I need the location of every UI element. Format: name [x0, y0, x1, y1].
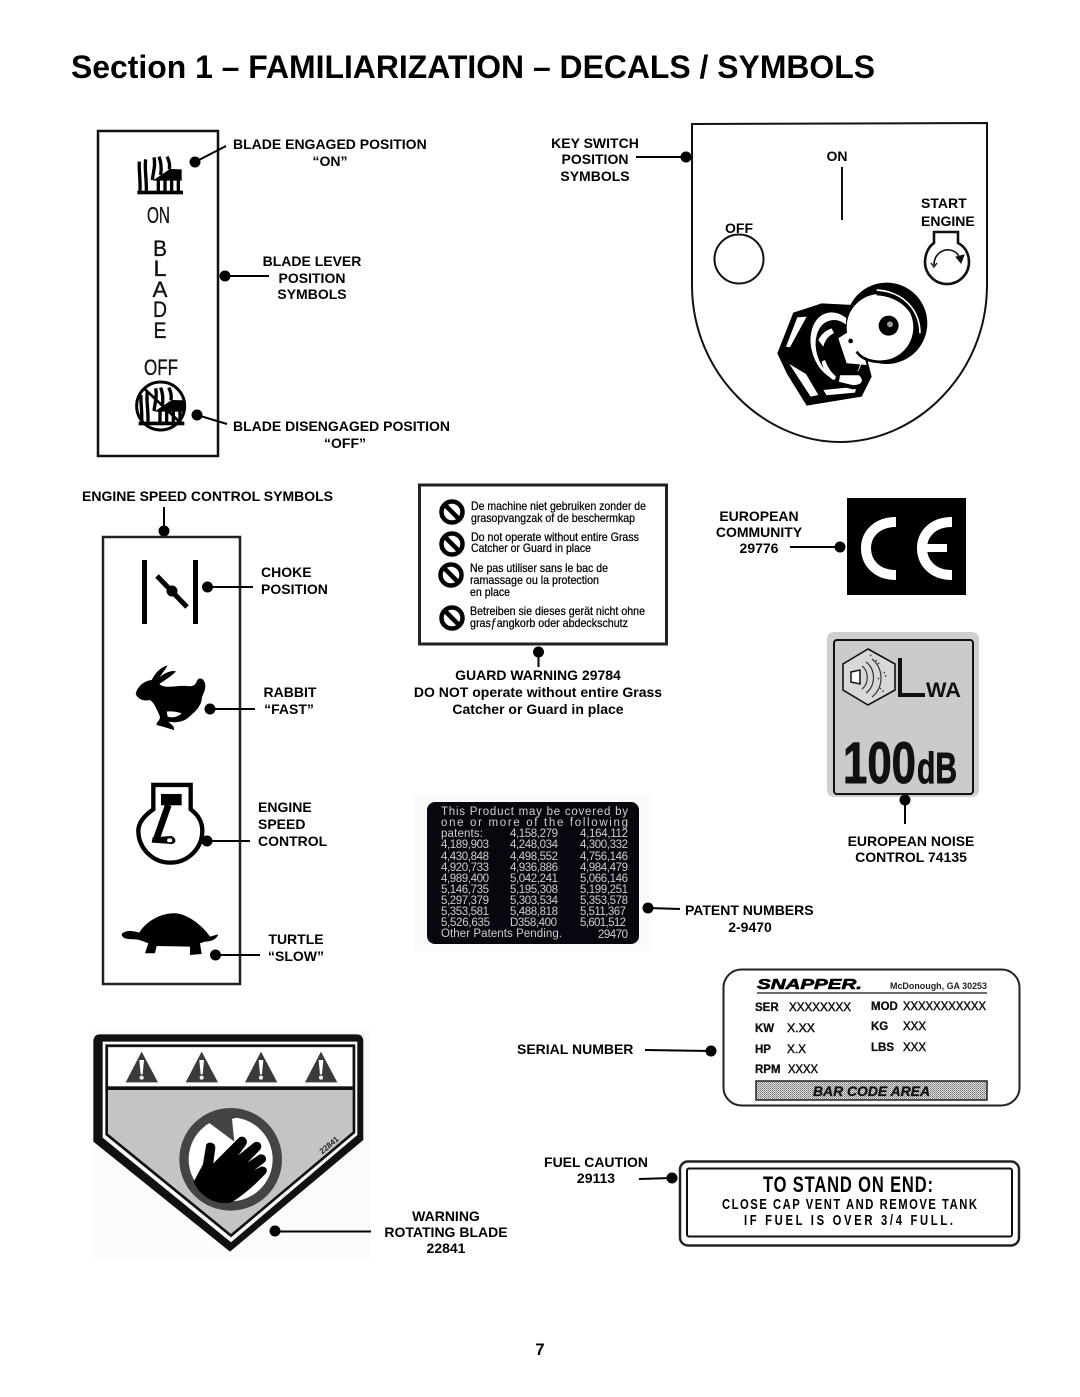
callout: guard warning 29784 [414, 646, 662, 717]
icon: blade disengaged [137, 382, 185, 430]
text: patent list: 4,248,034 [510, 839, 559, 851]
callout: serial number [517, 1041, 716, 1057]
icon: off circle [714, 234, 764, 284]
text: ON: ON [147, 202, 170, 228]
label: start engine: ENGINE [921, 213, 975, 229]
text: serial fields: XXXX [788, 1064, 818, 1076]
callout: turtle slow: TURTLE [268, 931, 324, 947]
text: patent list: 5,297,379 [441, 895, 489, 907]
icon: key in switch [777, 283, 927, 406]
callout: key switch position symbols: KEY SWITCH [551, 135, 639, 151]
text: fuel caution wording: IF FUEL IS OVER 3/4 FULL. [744, 1211, 953, 1228]
text: BLADE: L [154, 256, 166, 281]
text: serial fields: KG [871, 1021, 888, 1033]
callout: key switch position symbols: SYMBOLS [560, 168, 630, 184]
text: patent list: 29470 [598, 929, 628, 941]
text: patent list: 4,920,733 [441, 862, 489, 874]
icon: engine [138, 785, 202, 863]
callout: european community 29776: COMMUNITY [716, 524, 803, 540]
callout: blade disengaged position: BLADE DISENGAGED POSITION [233, 418, 450, 434]
page number: 7 [535, 1341, 545, 1359]
text: guard warning languages: Betreiben sie dieses gerät nicht ohne [470, 604, 645, 618]
panel: key switch decal [692, 123, 987, 442]
callout: european community 29776: EUROPEAN [719, 508, 799, 524]
callout: choke position: CHOKE [261, 564, 312, 580]
text: patent list: 5,303,534 [510, 895, 559, 907]
text: patent list: 4,189,903 [441, 839, 489, 851]
text: patent list [441, 806, 628, 941]
bar code area [756, 1081, 987, 1100]
text: patent list: 4,164,112 [580, 828, 628, 840]
callout: fuel caution 29113 [544, 1154, 678, 1186]
callout: blade disengaged position: “OFF” [324, 435, 366, 451]
callout: blade disengaged position [192, 410, 450, 451]
text: guard warning languages: en place [470, 585, 510, 599]
text: patent list: 4,498,552 [510, 851, 558, 863]
callout: rabbit fast [204, 684, 317, 717]
text: serial fields: SER [755, 1002, 779, 1014]
panel: LWA noise decal [827, 632, 979, 797]
text: patent list: 5,488,818 [510, 906, 558, 918]
text: fuel caution wording: TO STAND ON END: [763, 1173, 933, 1198]
text: guard warning languages: grasƒangkorb oder abdeckschutz [470, 616, 628, 630]
text: serial fields: X.X [787, 1044, 806, 1056]
text: patent list: 5,146,735 [441, 884, 489, 896]
icon: blade engaged [137, 157, 183, 194]
text: patent list: one or more of the following [441, 817, 628, 829]
text: decal number: 22841 [318, 1134, 341, 1156]
text: patent list: 5,511,367 [580, 906, 626, 918]
text: serial fields: XXX [903, 1021, 926, 1033]
callout: blade engaged position: “ON” [312, 153, 348, 169]
text: guard warning languages: Ne pas utiliser sans le bac de [470, 561, 608, 575]
icon: hand and blade [184, 1110, 277, 1206]
callout: blade lever symbols: POSITION [279, 270, 345, 286]
text: OFF: OFF [144, 355, 178, 380]
callout: guard warning 29784: GUARD WARNING 29784 [455, 667, 621, 683]
callout: serial number: SERIAL NUMBER [517, 1041, 633, 1057]
callout: european noise control [848, 794, 974, 865]
text: patent list: 5,526,635 [441, 917, 490, 929]
text: BLADE: A [152, 277, 168, 302]
text: patent list: 4,158,279 [510, 828, 558, 840]
text: patent list: 5,353,578 [580, 895, 628, 907]
text: BLADE: B [153, 236, 167, 261]
text: serial fields: HP [755, 1044, 771, 1056]
callout: patent numbers: PATENT NUMBERS [685, 902, 814, 918]
text: patent list: 4,756,146 [580, 851, 628, 863]
text: patent list: Other Patents Pending. [441, 928, 562, 940]
panel: fuel caution decal [680, 1162, 1019, 1246]
panel: rotating blade warning decal [93, 1030, 370, 1258]
text: patent list: 5,042,241 [510, 873, 558, 885]
text: fuel caution wording [722, 1173, 977, 1228]
callout: european noise control: EUROPEAN NOISE [848, 833, 974, 849]
label: start engine: START [921, 195, 967, 211]
text: patent list: 5,195,308 [510, 884, 558, 896]
text: snapper brand: McDonough, GA 30253 [890, 981, 987, 992]
callout: blade lever symbols: SYMBOLS [277, 286, 347, 302]
icon: turtle [122, 913, 218, 955]
text: BLADE [152, 236, 168, 343]
icon: warning triangles [126, 1052, 337, 1082]
text: guard warning languages [470, 499, 646, 630]
bar code area: BAR CODE AREA [813, 1083, 930, 1099]
callout: turtle slow: “SLOW” [268, 948, 324, 964]
text: patent list: D358,400 [510, 917, 557, 929]
text: patent list: 4,300,332 [580, 839, 628, 851]
label: ON: ON [826, 148, 848, 164]
callout: fuel caution 29113: 29113 [577, 1170, 615, 1186]
text: serial fields: LBS [871, 1042, 894, 1054]
callout: european community 29776 [716, 508, 846, 556]
text: L WA: WA [926, 679, 961, 702]
text: fuel caution wording: CLOSE CAP VENT AND REMOVE TANK [722, 1195, 977, 1212]
text: serial fields: KW [755, 1023, 774, 1035]
callout: european community 29776: 29776 [740, 540, 779, 556]
text: L WA [898, 658, 961, 702]
callout: choke position [202, 564, 328, 597]
panel: guard warning decal [420, 485, 666, 644]
text: serial fields: XXX [903, 1042, 926, 1054]
icon: sound hexagon [843, 649, 895, 705]
callout: engine speed control symbols [82, 488, 333, 536]
callout: engine speed control: SPEED [258, 816, 305, 832]
callout: blade lever symbols [220, 253, 361, 302]
panel: patent numbers decal [414, 795, 652, 951]
text: 100dB: 100 [843, 731, 916, 796]
text: serial fields: MOD [871, 1001, 898, 1013]
text: guard warning languages: Catcher or Guard in place [471, 541, 591, 555]
text: patent list: 5,601,512 [580, 917, 626, 929]
text: patent list: 5,199,251 [580, 884, 628, 896]
text: BLADE: E [154, 318, 166, 343]
callout: warning rotating blade 22841 [270, 1208, 508, 1256]
text: guard warning languages: grasopvangzak of de beschermkap [471, 511, 635, 525]
text: patent list: 4,989,400 [441, 873, 489, 885]
text: snapper brand: SNAPPER. [757, 977, 862, 993]
text: patent list: This Product may be covered by [441, 806, 628, 818]
callout: engine speed control: CONTROL [258, 833, 328, 849]
icon: rabbit [136, 665, 205, 730]
callout: fuel caution 29113: FUEL CAUTION [544, 1154, 648, 1170]
icon: choke [142, 560, 198, 624]
icon: prohibition signs [440, 502, 462, 628]
text: serial fields [755, 1001, 986, 1076]
label: OFF: OFF [725, 220, 753, 236]
callout: turtle slow [210, 931, 324, 964]
callout: warning rotating blade 22841: 22841 [427, 1240, 466, 1256]
label: start engine [921, 195, 975, 229]
text: guard warning languages: De machine niet gebruiken zonder de [471, 499, 646, 513]
text: guard warning languages: ramassage ou la protection [470, 573, 599, 587]
text: patent list: 4,936,886 [510, 862, 558, 874]
icon: CE mark decal [847, 498, 966, 595]
text: patent list: 4,984,479 [580, 862, 628, 874]
callout: rabbit fast: RABBIT [264, 684, 317, 700]
text: patent list: 4,430,848 [441, 851, 489, 863]
text: patent list: patents: [441, 828, 483, 840]
callout: european noise control: CONTROL 74135 [855, 849, 967, 865]
text: serial fields: RPM [755, 1064, 781, 1076]
callout: patent numbers [642, 902, 814, 935]
panel: serial number decal [724, 970, 1020, 1106]
text: 100dB: dB [917, 744, 957, 793]
callout: key switch position symbols: POSITION [562, 151, 628, 167]
callout: patent numbers: 2-9470 [728, 919, 772, 935]
icon: start engine [925, 232, 969, 284]
panel: blade lever decal [98, 131, 218, 456]
text: BLADE: D [153, 297, 167, 322]
text: patent list: 5,066,146 [580, 873, 628, 885]
callout: blade engaged position [190, 136, 427, 169]
callout: engine speed control: ENGINE [258, 799, 312, 815]
text: guard warning languages: Do not operate without entire Grass [471, 530, 639, 544]
text: serial fields: XXXXXXXX [789, 1002, 851, 1014]
callout: blade engaged position: BLADE ENGAGED POSITION [233, 136, 427, 152]
callout: warning rotating blade 22841: ROTATING BLADE [384, 1224, 508, 1240]
title: Section 1 – FAMILIARIZATION – DECALS / SYMBOLS [71, 48, 875, 85]
callout: engine speed control symbols: ENGINE SPEED CONTROL SYMBOLS [82, 488, 333, 504]
callout: guard warning 29784: DO NOT operate without entire Grass [414, 684, 662, 700]
callout: choke position: POSITION [261, 581, 328, 597]
callout: key switch position symbols [551, 135, 692, 184]
callout: guard warning 29784: Catcher or Guard in place [452, 701, 624, 717]
callout: warning rotating blade 22841: WARNING [412, 1208, 480, 1224]
text: serial fields: X.XX [787, 1023, 815, 1035]
panel: engine speed decal [103, 537, 240, 984]
callout: engine speed control [202, 799, 328, 849]
text: snapper brand [757, 977, 987, 993]
callout: blade lever symbols: BLADE LEVER [263, 253, 361, 269]
callout: rabbit fast: “FAST” [264, 701, 314, 717]
text: serial fields: XXXXXXXXXXX [903, 1001, 986, 1013]
text: patent list: 5,353,581 [441, 906, 489, 918]
